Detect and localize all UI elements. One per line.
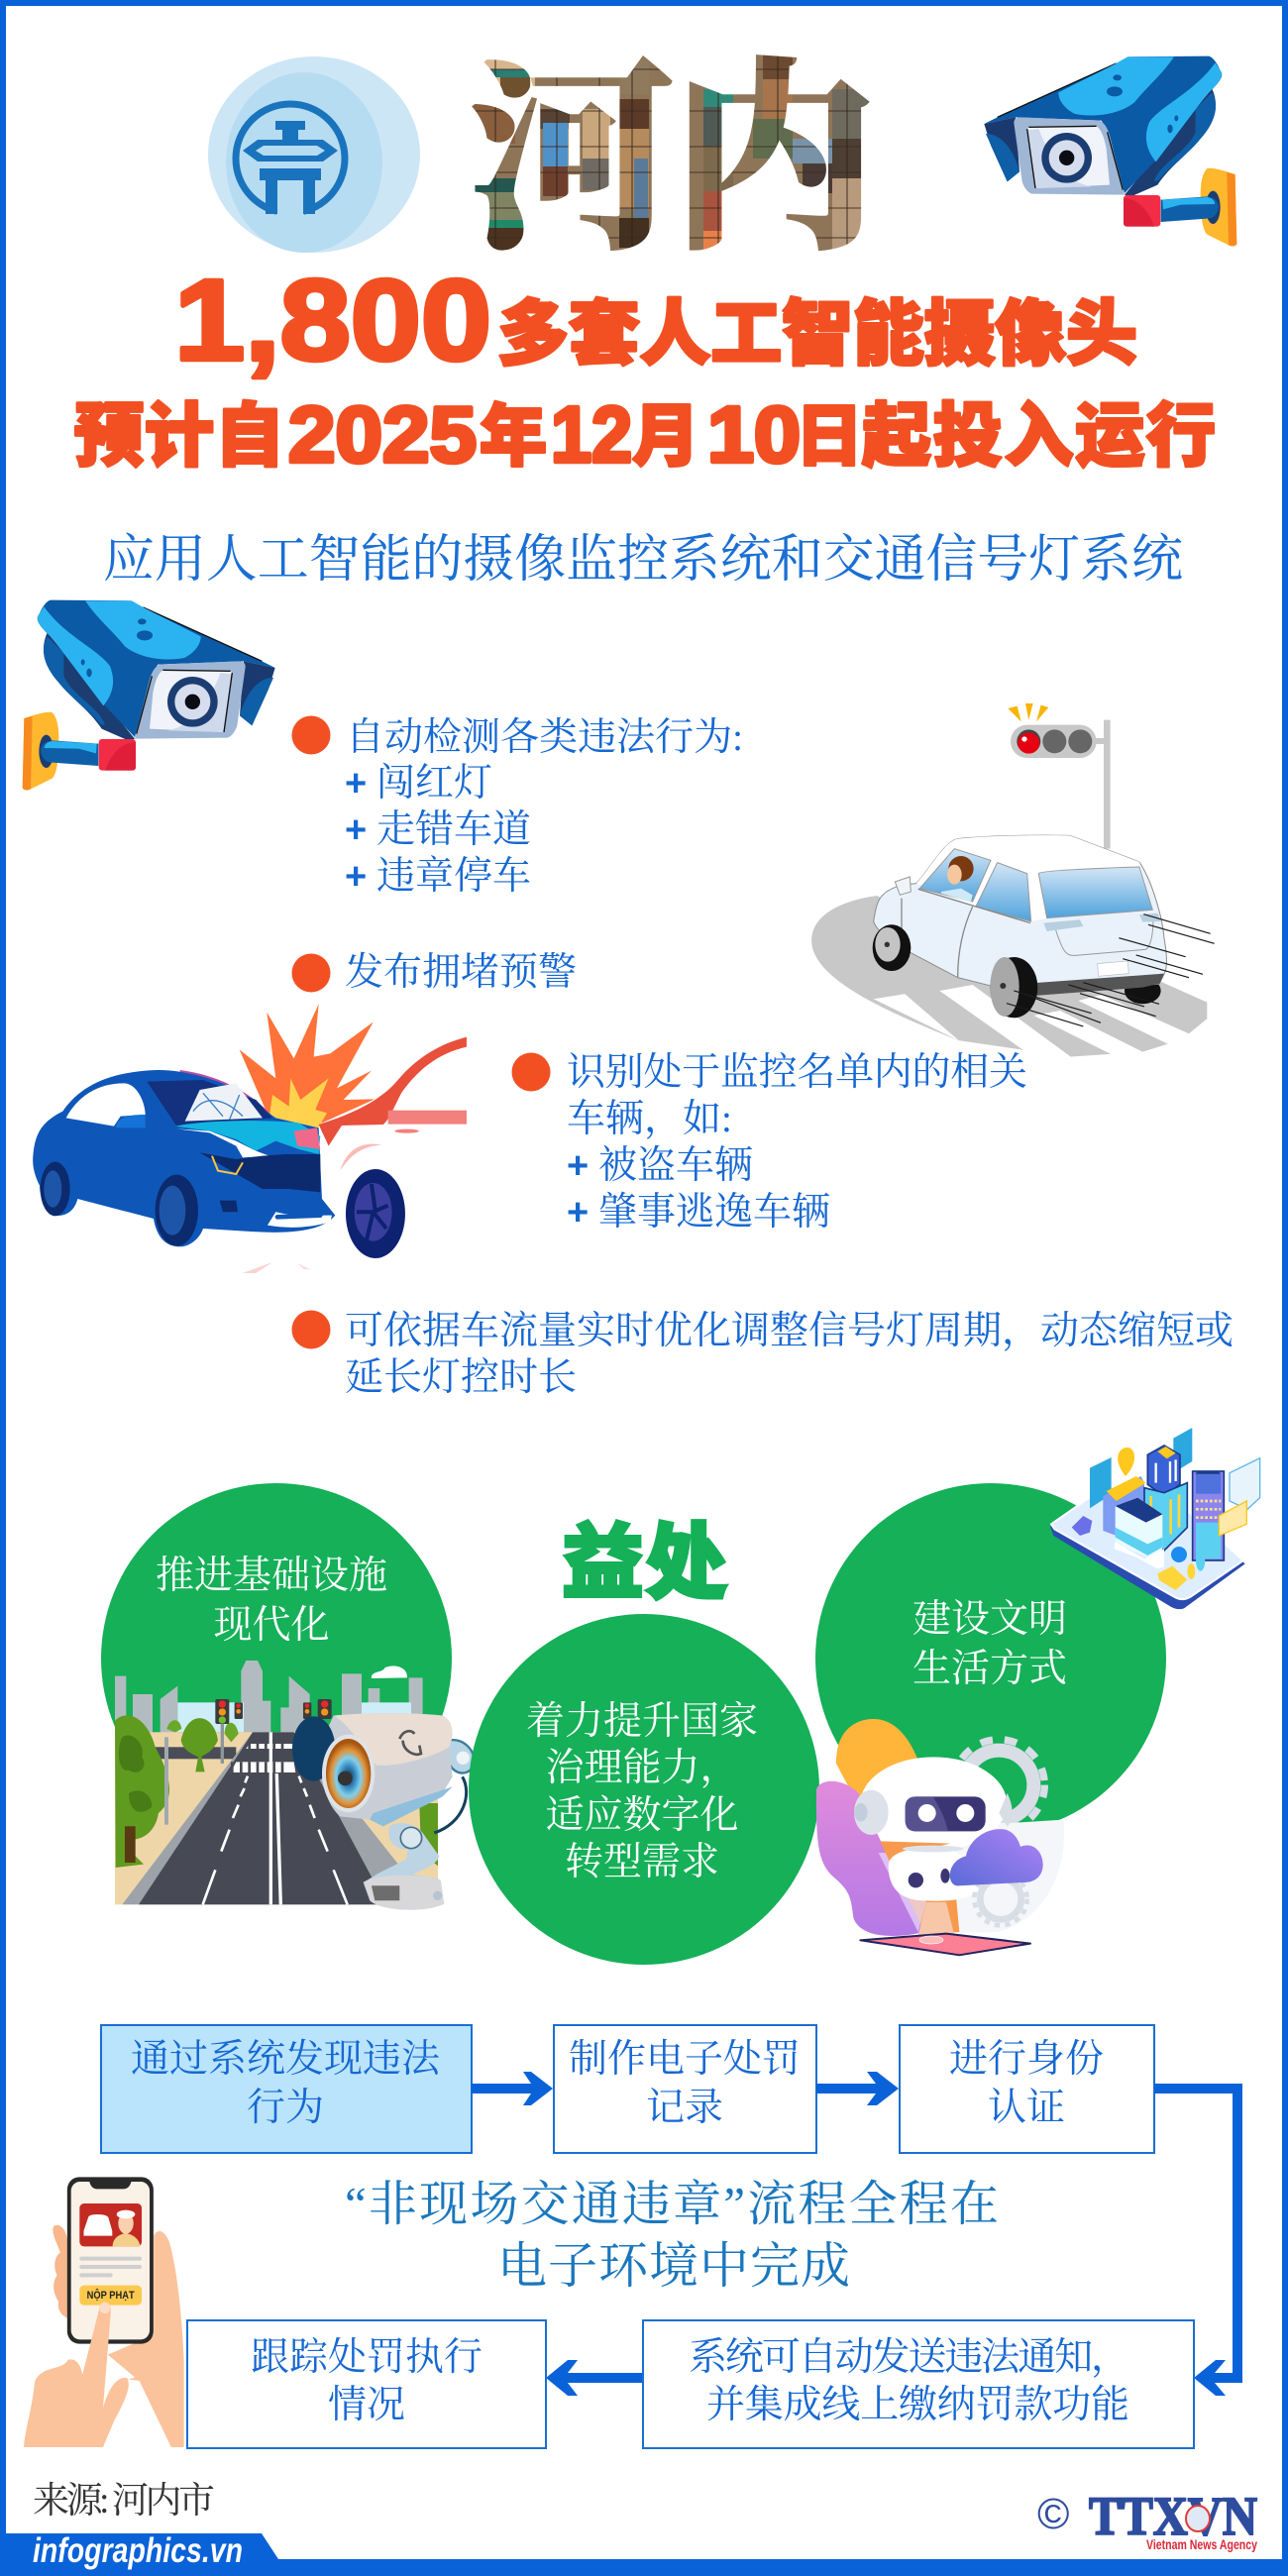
- bullet: violation detection: +: [345, 763, 367, 805]
- illustration: traffic light and white car: [811, 703, 1215, 1057]
- headline line 2: [74, 390, 1216, 479]
- benefit circle: civilised lifestyle: 生活方式: [912, 1648, 1067, 1690]
- icon: CCTV camera, header: [984, 56, 1236, 246]
- illustration: AI robot with cloud and gears: [816, 1719, 1064, 1955]
- benefit circle: governance capacity: 适应数字化: [545, 1794, 739, 1837]
- icon: CCTV camera, left: [23, 600, 275, 790]
- illustration: crashed blue car: [33, 1004, 467, 1273]
- headline line 2: 月: [632, 399, 699, 475]
- central statement: 电子环境中完成: [497, 2238, 850, 2294]
- process box 4: send notification: 系统可自动发送违法通知，: [689, 2336, 1129, 2379]
- footer tab: infographics.vn: [0, 2531, 1288, 2576]
- bullet: watchlist vehicles: 识别处于监控名单内的相关: [567, 1051, 1027, 1094]
- process box 4: send notification: [643, 2320, 1194, 2448]
- process box 5: track enforcement: [187, 2320, 546, 2448]
- headline line 2: 年: [480, 399, 547, 475]
- headline line 2: 日: [796, 399, 863, 475]
- heading: benefits: 益处: [562, 1517, 727, 1609]
- process box 1: detect violation: 通过系统发现违法: [131, 2038, 441, 2081]
- process box 1: detect violation: [101, 2025, 472, 2153]
- headline line 1: [174, 256, 1137, 384]
- bullet: watchlist vehicles: +: [567, 1145, 589, 1187]
- central statement: “非现场交通违章”流程全程在: [345, 2177, 999, 2231]
- process box 1: detect violation: 行为: [247, 2087, 324, 2129]
- bullet: watchlist vehicles: [511, 1051, 1027, 1234]
- bullet: watchlist vehicles: +: [567, 1192, 589, 1234]
- benefit circle: infrastructure: [101, 1483, 452, 1834]
- benefit circle: civilised lifestyle: 建设文明: [912, 1598, 1067, 1641]
- headline line 2: 12: [551, 390, 632, 479]
- benefit circle: civilised lifestyle: [815, 1483, 1166, 1834]
- footer tab: infographics.vn: infographics.vn: [33, 2531, 243, 2570]
- benefit circle: governance capacity: 着力提升国家: [526, 1700, 758, 1743]
- headline line 2: 起投入运行: [862, 397, 1216, 475]
- subtitle: 应用人工智能的摄像监控系统和交通信号灯系统: [103, 532, 1183, 589]
- process box 5: track enforcement: 跟踪处罚执行: [251, 2336, 483, 2379]
- benefit circle: governance capacity: 转型需求: [565, 1841, 719, 1883]
- bullet: violation detection: 闯红灯: [376, 762, 492, 805]
- process box 3: verify identity: [900, 2025, 1154, 2153]
- process box 3: verify identity: 认证: [988, 2087, 1065, 2129]
- central statement: [345, 2177, 999, 2294]
- arrow: box 2 to box 3: [816, 2072, 899, 2105]
- bullet: violation detection: [291, 715, 743, 898]
- headline line 1: 1,800: [174, 256, 491, 384]
- process box 2: create record: 制作电子处罚: [569, 2038, 801, 2081]
- illustration: smart city on phone: [1050, 1428, 1260, 1609]
- arrow: box 1 to box 2: [472, 2072, 553, 2105]
- process box 2: create record: 记录: [646, 2087, 723, 2129]
- bullet: violation detection: 违章停车: [376, 855, 531, 898]
- logo: TTXVN: [1037, 2486, 1257, 2552]
- source note: 来源: 河内市: [33, 2480, 215, 2522]
- illustration: hand with phone: NỘP PHẠT: [87, 2289, 135, 2302]
- bullet: violation detection: 自动检测各类违法行为:: [346, 716, 743, 759]
- benefit circle: infrastructure: 现代化: [213, 1604, 330, 1647]
- bullet: signal timing optimisation: [291, 1310, 1234, 1399]
- logo: TTXVN: ©: [1037, 2490, 1069, 2538]
- arrow: box 3 around to box 4: [1154, 2084, 1242, 2396]
- bullet: signal timing optimisation: 可依据车流量实时优化调整信号灯周期，动态缩短或: [345, 1310, 1234, 1352]
- bullet: watchlist vehicles: 被盗车辆: [598, 1144, 753, 1187]
- bullet: violation detection: +: [345, 856, 367, 898]
- process box 5: track enforcement: 情况: [328, 2384, 405, 2426]
- bullet: signal timing optimisation: 延长灯控时长: [345, 1356, 577, 1399]
- bullet: congestion warning: 发布拥堵预警: [345, 951, 577, 994]
- illustration: hand with phone: [24, 2177, 184, 2447]
- bullet: violation detection: 走错车道: [376, 808, 531, 851]
- headline line 1: 多套人工智能摄像头: [497, 295, 1137, 375]
- benefit circle: infrastructure: 推进基础设施: [156, 1555, 387, 1597]
- bullet: watchlist vehicles: 车辆，如:: [567, 1098, 732, 1140]
- icon: Hanoi emblem: [208, 56, 420, 253]
- illustration: road with traffic lights and camera: [115, 1661, 475, 1910]
- title: Hanoi in photo-textured letters: 河内: [470, 50, 876, 274]
- arrow: box 4 to box 5: [546, 2360, 642, 2396]
- headline line 2: 10: [707, 390, 801, 479]
- process box 4: send notification: 并集成线上缴纳罚款功能: [706, 2384, 1129, 2426]
- bullet: violation detection: +: [345, 809, 367, 851]
- headline line 2: 预计自: [74, 397, 284, 475]
- process box 2: create record: [554, 2025, 816, 2153]
- benefit circle: governance capacity: 治理能力，: [545, 1747, 739, 1789]
- benefit circle: governance capacity: [469, 1614, 819, 1965]
- bullet: watchlist vehicles: 肇事逃逸车辆: [598, 1191, 830, 1234]
- process box 3: verify identity: 进行身份: [949, 2038, 1104, 2081]
- headline line 2: 2025: [288, 390, 477, 479]
- logo: TTXVN: TTXVN: [1089, 2486, 1257, 2546]
